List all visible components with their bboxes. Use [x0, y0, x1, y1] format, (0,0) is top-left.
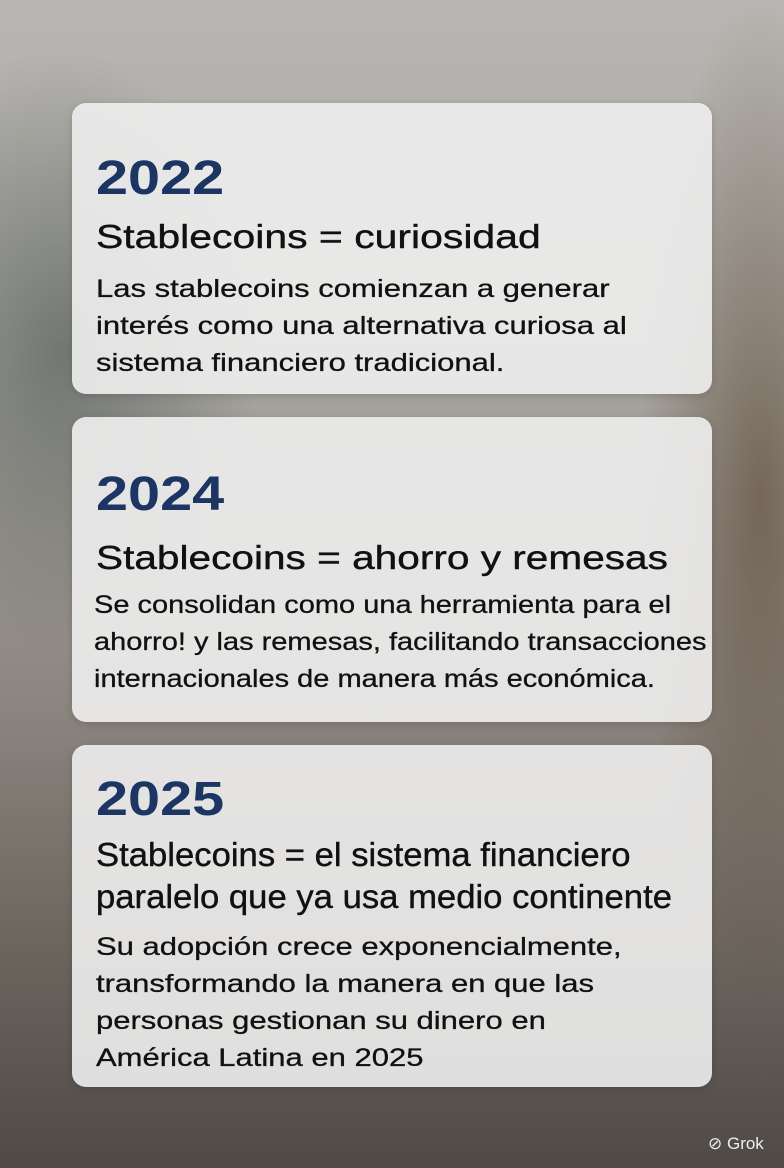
- heading 2025: [96, 836, 672, 916]
- body 2024: internacionales de manera más económica.: [94, 665, 655, 693]
- body 2022: sistema financiero tradicional.: [96, 349, 504, 377]
- body 2025: Su adopción crece exponencialmente,: [96, 933, 622, 961]
- body 2024: ahorro! y las remesas, facilitando transacciones: [94, 628, 707, 656]
- body 2025: [96, 933, 622, 1072]
- year 2024: 2024: [96, 468, 224, 521]
- body 2025: personas gestionan su dinero en: [96, 1007, 546, 1035]
- body 2022: interés como una alternativa curiosa al: [96, 312, 627, 340]
- panel: 2022: [72, 103, 712, 394]
- body 2024: [94, 591, 707, 693]
- watermark: ⊘ Grok: [708, 1134, 764, 1153]
- body 2025: América Latina en 2025: [96, 1044, 423, 1072]
- year 2022: 2022: [96, 152, 224, 205]
- body 2022: Las stablecoins comienzan a generar: [96, 275, 610, 303]
- panel: 2025: [72, 745, 712, 1087]
- panel: 2024: [72, 417, 712, 722]
- body 2025: transformando la manera en que las: [96, 970, 594, 998]
- heading 2024: Stablecoins = ahorro y remesas: [96, 539, 668, 576]
- body 2024: Se consolidan como una herramienta para el: [94, 591, 671, 619]
- body 2022: [96, 275, 627, 377]
- heading 2025: paralelo que ya usa medio continente: [96, 878, 672, 915]
- heading 2022: Stablecoins = curiosidad: [96, 218, 541, 255]
- year 2025: 2025: [96, 773, 224, 826]
- heading 2025: Stablecoins = el sistema financiero: [96, 836, 630, 873]
